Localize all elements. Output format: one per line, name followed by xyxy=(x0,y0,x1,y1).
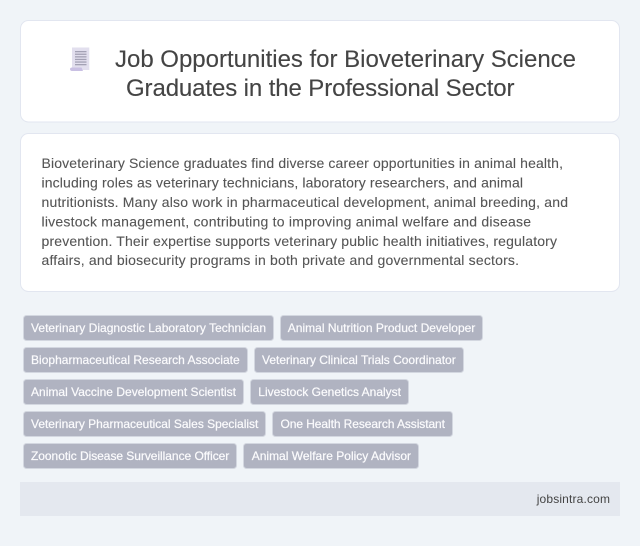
tag: One Health Research Assistant xyxy=(272,412,452,436)
tag: Veterinary Diagnostic Laboratory Technician: Veterinary Diagnostic Laboratory Technician xyxy=(31,321,266,335)
tag: Biopharmaceutical Research Associate: Biopharmaceutical Research Associate xyxy=(31,353,240,367)
panel: description card xyxy=(20,134,620,292)
footer bar xyxy=(20,482,620,516)
tag: Animal Vaccine Development Scientist xyxy=(24,380,244,404)
tag: Zoonotic Disease Surveillance Officer xyxy=(24,444,236,468)
tag: Veterinary Clinical Trials Coordinator xyxy=(254,348,464,372)
description text: Bioveterinary Science graduates find diverse career opportunities in animal health, xyxy=(42,155,563,171)
tag: Animal Nutrition Product Developer: Animal Nutrition Product Developer xyxy=(288,321,475,335)
tag: Biopharmaceutical Research Associate xyxy=(24,348,248,372)
tag: Zoonotic Disease Surveillance Officer: Zoonotic Disease Surveillance Officer xyxy=(31,449,229,463)
tag: Animal Vaccine Development Scientist: Animal Vaccine Development Scientist xyxy=(31,385,237,399)
tag: Veterinary Diagnostic Laboratory Technician xyxy=(24,316,274,340)
description text: livestock management, contributing to improving animal welfare and disease xyxy=(42,214,531,230)
tag: Veterinary Pharmaceutical Sales Specialist xyxy=(24,412,266,436)
panel: job title tags xyxy=(24,316,482,468)
title: Job Opportunities for Bioveterinary Science xyxy=(115,46,576,73)
icon: paper scroll document xyxy=(70,48,89,71)
title xyxy=(115,46,576,102)
tag: Animal Welfare Policy Advisor xyxy=(244,444,418,468)
panel: header card xyxy=(20,20,620,122)
tag: One Health Research Assistant: One Health Research Assistant xyxy=(280,417,446,431)
tag: Animal Nutrition Product Developer xyxy=(280,316,482,340)
tag: Livestock Genetics Analyst: Livestock Genetics Analyst xyxy=(258,385,402,399)
description text: prevention. Their expertise supports veterinary public health initiatives, regulatory xyxy=(42,233,557,249)
tag: Veterinary Clinical Trials Coordinator: Veterinary Clinical Trials Coordinator xyxy=(262,353,456,367)
tag: Livestock Genetics Analyst xyxy=(250,380,408,404)
tag: Animal Welfare Policy Advisor: Animal Welfare Policy Advisor xyxy=(252,449,411,463)
title: Graduates in the Professional Sector xyxy=(126,75,514,102)
tag: Veterinary Pharmaceutical Sales Specialist: Veterinary Pharmaceutical Sales Specialist xyxy=(31,417,259,431)
description text: affairs, and biosecurity programs in both private and governmental sectors. xyxy=(42,252,519,268)
description text xyxy=(42,155,568,268)
description text: nutritionists. Many also work in pharmaceutical development, animal breeding, and xyxy=(42,194,568,210)
footer source text: jobsintra.com xyxy=(536,492,610,506)
description text: including roles as veterinary technicians, laboratory researchers, and animal xyxy=(42,174,523,190)
